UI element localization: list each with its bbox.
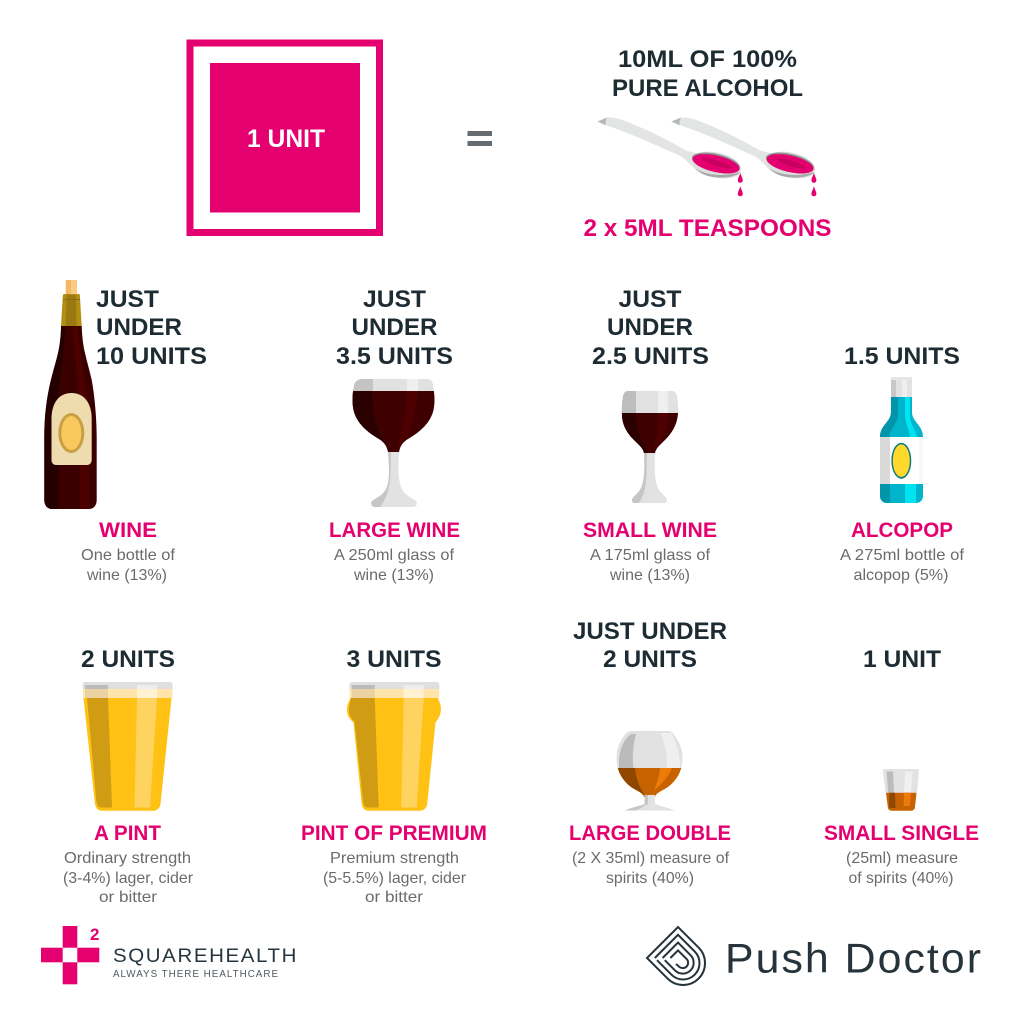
units label: 1 unit: 1 UNIT [863, 646, 941, 673]
caption: pint of premium: Premium strength [330, 850, 459, 867]
units label: just under 10 units: UNDER [96, 314, 182, 341]
units label: just under 2 units [573, 618, 727, 673]
unit square outline [190, 43, 380, 232]
caption: small single [824, 822, 979, 887]
caption: alcopop: alcopop (5%) [854, 567, 948, 584]
logo: push doctor [647, 927, 983, 985]
icon: alcopop bottle [880, 377, 923, 503]
caption: pint of premium: PINT OF PREMIUM [301, 822, 487, 845]
heading: 2 x 5ml teaspoons: 2 x 5ML TEASPOONS [584, 215, 832, 242]
caption: small wine: A 175ml glass of [590, 547, 711, 564]
panel: pint of premium [301, 646, 487, 906]
panel: one unit definition [190, 43, 492, 232]
units label: just under 2 units: JUST UNDER [573, 618, 727, 645]
caption: a pint: (3-4%) lager, cider [63, 870, 194, 887]
units label: 1.5 units: 1.5 UNITS [844, 343, 960, 370]
heading: 10ml of pure alcohol: 10ML OF 100% [618, 46, 797, 73]
caption: large double: (2 X 35ml) measure of [572, 850, 730, 867]
units label: just under 3.5 units: UNDER [352, 314, 438, 341]
caption: pint of premium: (5-5.5%) lager, cider [323, 870, 467, 887]
icon: drops [738, 172, 816, 196]
units label: 2 units: 2 UNITS [81, 646, 175, 673]
caption: pint of premium: or bitter [365, 889, 424, 906]
units label: just under 2.5 units [592, 286, 709, 370]
panel: small wine [583, 286, 717, 584]
panel: a pint [63, 646, 194, 906]
caption: large wine: A 250ml glass of [334, 547, 455, 564]
icon: brandy glass [616, 731, 682, 810]
caption: pint of premium [301, 822, 487, 906]
caption: small wine: wine (13%) [609, 567, 690, 584]
panel: wine bottle [40, 280, 207, 584]
superscript two: 2 [90, 925, 99, 944]
caption: alcopop: A 275ml bottle of [840, 547, 965, 564]
unit square fill with label [210, 63, 360, 212]
caption: large wine [329, 519, 460, 584]
caption: small wine: SMALL WINE [583, 519, 717, 542]
caption: small single: SMALL SINGLE [824, 822, 979, 845]
units label: just under 3.5 units: JUST [363, 286, 426, 313]
heading: 10ml of pure alcohol [612, 46, 803, 102]
label on bottle [52, 393, 92, 465]
caption: a pint: Ordinary strength [64, 850, 191, 867]
units label: just under 2.5 units: UNDER [607, 314, 693, 341]
icon: wine bottle [44, 280, 97, 509]
units label: just under 10 units [96, 286, 207, 370]
caption: small wine [583, 519, 717, 584]
units label: 3 units: 3 UNITS [346, 646, 442, 673]
icon: teaspoon left [598, 117, 744, 183]
caption: large wine: wine (13%) [353, 567, 434, 584]
caption: a pint: A PINT [94, 822, 161, 845]
units label: just under 3.5 units: 3.5 UNITS [336, 343, 453, 370]
units label: just under 2 units: 2 UNITS [603, 646, 697, 673]
wordmark: Push Doctor [725, 935, 983, 982]
caption: large wine: LARGE WINE [329, 519, 460, 542]
units label: just under 2.5 units: JUST [618, 286, 682, 313]
caption: large double: LARGE DOUBLE [569, 822, 731, 845]
panel: large wine [329, 286, 460, 584]
tagline: ALWAYS THERE HEALTHCARE [113, 969, 279, 980]
icon: pint glass [83, 682, 173, 811]
units label: just under 3.5 units [336, 286, 453, 370]
caption: small single: (25ml) measure [846, 850, 958, 867]
heading: 10ml of pure alcohol: PURE ALCOHOL [612, 75, 803, 102]
equals sign [468, 131, 492, 146]
icon: teaspoon right [672, 117, 818, 183]
wordmark: SQUAREHEALTH [113, 946, 298, 967]
caption: alcopop [840, 519, 965, 584]
icon: concentric drop [647, 927, 705, 985]
icon: premium pint glass [347, 682, 441, 811]
caption: large double: spirits (40%) [606, 870, 694, 887]
panel: alcopop [840, 343, 965, 584]
icon: shot glass [883, 769, 919, 811]
icon: pink cross [41, 926, 99, 984]
caption: a pint: or bitter [99, 889, 158, 906]
icon: small wine glass [622, 391, 678, 503]
caption: a pint [63, 822, 194, 906]
panel: small single [824, 646, 979, 887]
units label: just under 10 units: 10 UNITS [96, 343, 207, 370]
caption: alcopop: ALCOPOP [851, 519, 953, 542]
caption: large double [569, 822, 731, 887]
logo: square health [41, 925, 298, 984]
icon: large wine glass [352, 379, 434, 507]
caption: wine: wine (13%) [86, 567, 167, 584]
icon: two teaspoons with drops [598, 117, 818, 196]
caption: wine: WINE [99, 519, 157, 542]
caption: wine: One bottle of [81, 547, 176, 564]
units label: just under 2.5 units: 2.5 UNITS [592, 343, 709, 370]
units label: just under 10 units: JUST [96, 286, 159, 313]
unit square fill with label: 1 UNIT [247, 125, 325, 153]
caption: wine [81, 519, 176, 584]
panel: large double [569, 618, 731, 887]
caption: small single: of spirits (40%) [848, 870, 954, 887]
